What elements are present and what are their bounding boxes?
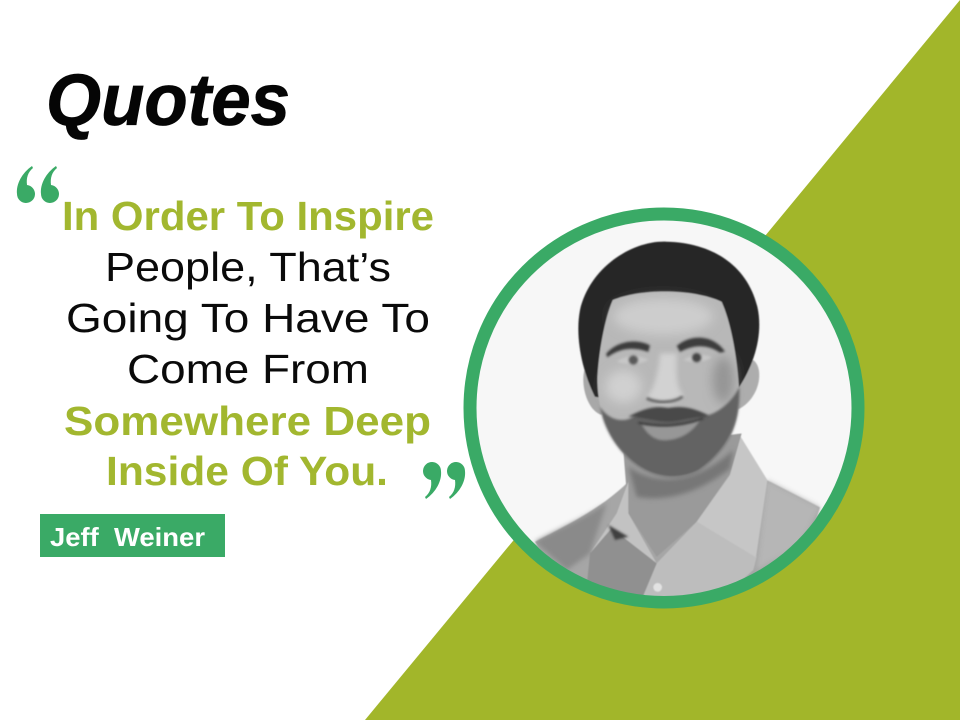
ears xyxy=(582,370,602,416)
icon: closing quotation marks xyxy=(423,462,465,499)
quote text: Inside Of You. xyxy=(106,448,388,494)
left eye xyxy=(619,356,646,364)
title: Quotes xyxy=(46,60,290,141)
quote text: Somewhere Deep xyxy=(64,398,431,444)
forehead highlight xyxy=(613,298,713,335)
beard xyxy=(600,387,739,477)
collar left xyxy=(590,482,657,563)
author badge xyxy=(40,514,225,557)
shirt xyxy=(534,446,820,580)
mouth and lip xyxy=(642,420,700,440)
quote text: Come From xyxy=(127,346,369,392)
nose xyxy=(647,353,683,403)
face xyxy=(597,291,739,477)
placket and undershirt xyxy=(644,522,756,596)
quote text: Going To Have To xyxy=(66,295,430,341)
olive diagonal triangle xyxy=(365,0,960,720)
author badge: Jeff Weiner xyxy=(50,522,205,552)
neck xyxy=(623,433,742,557)
right cheek shading xyxy=(713,357,734,403)
portrait in green ring xyxy=(470,214,858,603)
mustache xyxy=(628,407,708,422)
left cheek highlight xyxy=(605,370,642,403)
quote text: People, That’s xyxy=(105,244,391,290)
hair xyxy=(578,242,759,407)
collar right xyxy=(697,437,767,557)
quote text: In Order To Inspire xyxy=(62,193,434,239)
right eye xyxy=(686,355,710,362)
eyebrows xyxy=(606,341,650,357)
icon: opening quotation marks xyxy=(17,166,59,203)
quote text xyxy=(62,193,434,494)
